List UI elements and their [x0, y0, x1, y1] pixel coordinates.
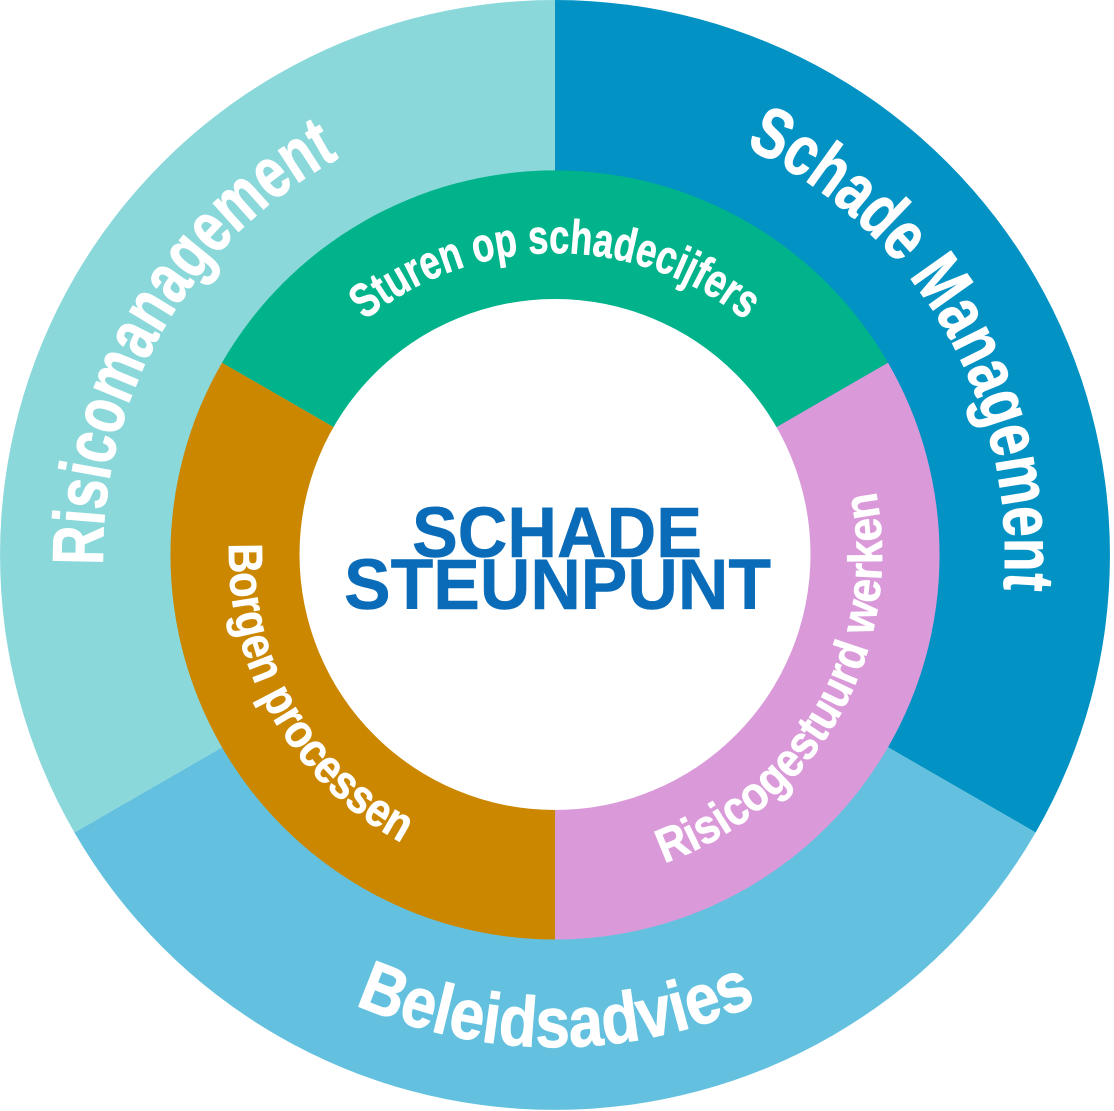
segment: Beleidsadvies [74, 555, 1036, 1110]
segment: Schade Management [555, 0, 1110, 832]
label: Beleidsadvies: Beleidsadvies [358, 960, 752, 1048]
segment: Risicogestuurd werken [555, 363, 940, 940]
center white circle [300, 299, 810, 810]
title: Schade Steunpunt: STEUNPUNT [344, 546, 771, 625]
label: Risicogestuurd werken: Risicogestuurd werken [654, 494, 882, 863]
label: Schade Management: Schade Management [751, 108, 1052, 592]
segment: Risicomanagement [0, 0, 555, 832]
label: Risicomanagement: Risicomanagement [52, 120, 339, 562]
label: Borgen processen: Borgen processen [226, 546, 410, 842]
title: Schade Steunpunt: SCHADE [412, 494, 702, 573]
segment: Sturen op schadecijfers [222, 170, 888, 555]
segment: Borgen processen [170, 363, 555, 940]
title: Schade Steunpunt [344, 494, 771, 625]
panel: middle ring [170, 170, 940, 940]
label: Sturen op schadecijfers: Sturen op schadecijfers [350, 218, 757, 318]
